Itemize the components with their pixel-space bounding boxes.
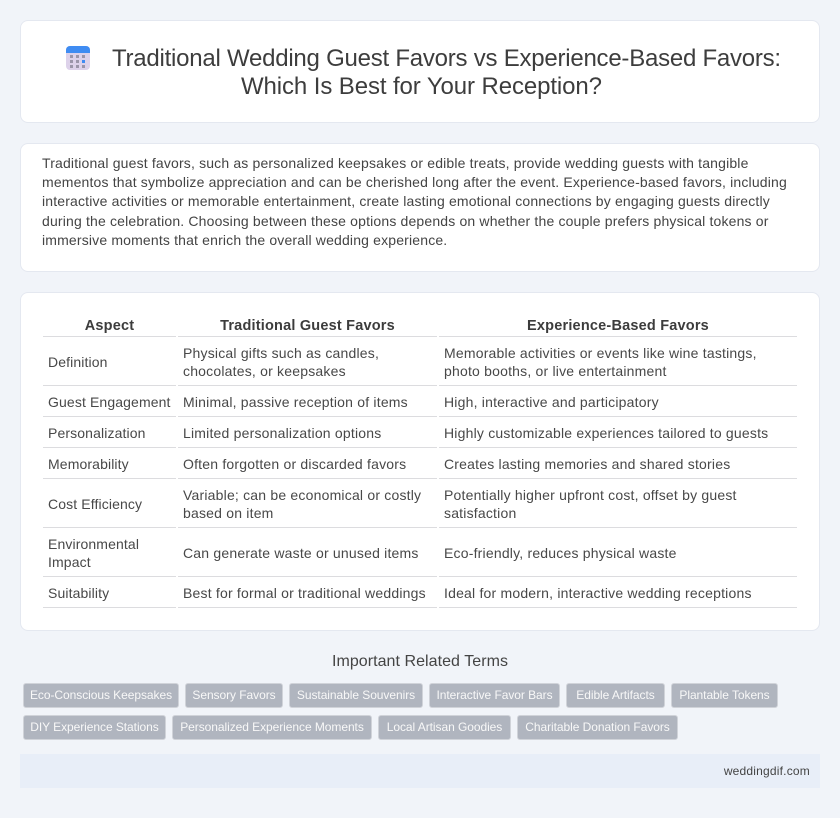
tag: [378, 715, 511, 740]
comparison table: Memorable activities or events like wine tastings,: [444, 345, 757, 361]
row: Environmental Impact: Environmental: [48, 536, 139, 552]
comparison table: Can generate waste or unused items: [183, 545, 419, 561]
title: [112, 45, 781, 100]
row: Definition: Definition: [48, 354, 108, 370]
title: Traditional Wedding Guest Favors vs Experience-Based Favors:: [112, 45, 781, 72]
tag: [23, 683, 179, 708]
footer text: weddingdif.com: [724, 764, 810, 778]
comparison table: Often forgotten or discarded favors: [183, 456, 406, 472]
tag: Personalized Experience Moments: [180, 720, 364, 734]
related terms heading: Important Related Terms: [332, 653, 508, 670]
intro text: immersive moments that enrich the overall wedding experience.: [42, 232, 447, 248]
comparison table: Limited personalization options: [183, 425, 381, 441]
tag: [172, 715, 372, 740]
row: Memorability: Memorability: [48, 456, 129, 472]
tag: [671, 683, 778, 708]
comparison table: Ideal for modern, interactive wedding receptions: [444, 585, 752, 601]
icon: calendar: [66, 46, 90, 70]
comparison table: Creates lasting memories and shared stories: [444, 456, 730, 472]
header panel: [20, 20, 820, 123]
row: Suitability: Suitability: [48, 585, 109, 601]
header: Traditional Guest Favors: Traditional Guest Favors: [220, 318, 395, 334]
comparison table: photo booths, or live entertainment: [444, 363, 667, 379]
tag: Sensory Favors: [192, 688, 276, 702]
tag: [185, 683, 283, 708]
row: Guest Engagement: Guest Engagement: [48, 394, 171, 410]
tag: [566, 683, 665, 708]
tag: Interactive Favor Bars: [436, 688, 553, 702]
row: Cost Efficiency: Cost Efficiency: [48, 496, 142, 512]
row: Environmental Impact: Impact: [48, 554, 91, 570]
comparison table: Variable; can be economical or costly: [183, 487, 421, 503]
tag: Plantable Tokens: [679, 688, 770, 702]
tag: [289, 683, 423, 708]
intro text: Traditional guest favors, such as personalized keepsakes or edible treats, provide wedding guests with tangible: [42, 155, 749, 171]
comparison table: Best for formal or traditional weddings: [183, 585, 426, 601]
tag: Eco-Conscious Keepsakes: [30, 688, 172, 702]
comparison table: based on item: [183, 505, 274, 521]
row: Personalization: Personalization: [48, 425, 146, 441]
intro text: mementos that symbolize appreciation and can be cherished long after the event. Experience-based favors, including: [42, 174, 787, 190]
row: Environmental Impact: [48, 536, 139, 570]
tag: Local Artisan Goodies: [387, 720, 502, 734]
tag: [429, 683, 560, 708]
intro text: during the celebration. Choosing between these options depends on whether the couple prefers physical tokens or: [42, 213, 769, 229]
tag: Sustainable Souvenirs: [297, 688, 415, 702]
header: Experience-Based Favors: Experience-Based Favors: [527, 318, 709, 334]
intro text: interactive activities or memorable entertainment, create lasting emotional connections by engaging guests directly: [42, 193, 770, 209]
tag: Edible Artifacts: [576, 688, 655, 702]
tag: Charitable Donation Favors: [525, 720, 670, 734]
footer bar: [20, 754, 820, 788]
intro panel: [20, 143, 820, 272]
tag: DIY Experience Stations: [30, 720, 159, 734]
comparison table: chocolates, or keepsakes: [183, 363, 346, 379]
comparison table: Minimal, passive reception of items: [183, 394, 408, 410]
header: Aspect: Aspect: [85, 318, 134, 334]
comparison table: High, interactive and participatory: [444, 394, 659, 410]
title: Which Is Best for Your Reception?: [241, 73, 602, 100]
tag: [517, 715, 678, 740]
comparison table: Physical gifts such as candles,: [183, 345, 379, 361]
comparison table: Eco-friendly, reduces physical waste: [444, 545, 677, 561]
table panel: [20, 292, 820, 631]
tag: [23, 715, 166, 740]
intro text: [42, 155, 787, 248]
comparison table: Potentially higher upfront cost, offset by guest: [444, 487, 737, 503]
comparison table: Highly customizable experiences tailored to guests: [444, 425, 768, 441]
comparison table: satisfaction: [444, 505, 516, 521]
